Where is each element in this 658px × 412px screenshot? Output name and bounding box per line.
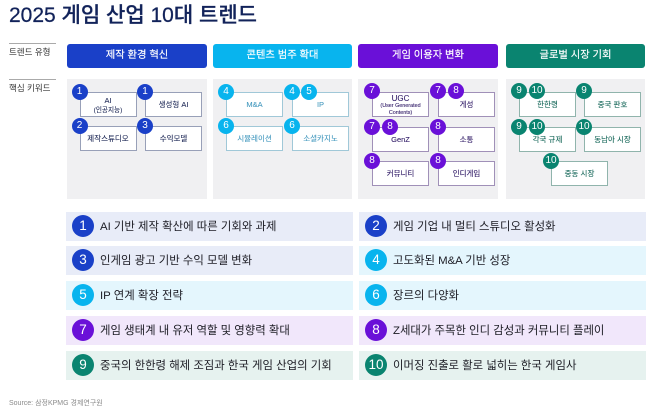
trend 5: 5 (79, 287, 87, 302)
keyword: generative AI: 생성형 AI (159, 100, 188, 109)
keyword: social casino (292, 126, 349, 151)
keyword: AI: AI (104, 96, 112, 104)
row label: key keywords: 핵심 키워드 (9, 83, 50, 93)
trend 7: 7 (79, 322, 87, 337)
header: content expansion: 콘텐츠 범주 확대 (246, 50, 319, 61)
trend 6: 장르의 다양화 (393, 290, 459, 302)
panel: production keywords: 1 (142, 86, 148, 97)
panel: user keywords: 7 (369, 85, 375, 96)
keyword: China license: 중국 판호 (598, 100, 627, 109)
panel: user keywords: 8 (387, 121, 393, 132)
trend 1 (66, 212, 353, 241)
panel: global keywords (506, 79, 645, 199)
keyword: M&A: M&A (246, 100, 263, 109)
trend 4: 고도화된 M&A 기반 성장 (393, 255, 510, 267)
keyword: national regulation (519, 127, 576, 152)
keyword: indie game: 인디게임 (453, 169, 480, 178)
panel: global keywords: 10 (545, 155, 557, 166)
keyword: generative AI (145, 92, 202, 117)
panel: user keywords (358, 79, 498, 199)
header: content expansion (213, 44, 352, 68)
trend 9: 중국의 한한령 해제 조짐과 한국 게임 산업의 기회 (100, 360, 332, 372)
panel: global keywords: 9 (516, 121, 522, 132)
panel: user keywords: 8 (369, 155, 375, 166)
keyword: indie game (438, 161, 495, 186)
keyword: gameplay nature: 게성 (460, 100, 473, 109)
keyword: UGC (372, 92, 429, 117)
row label: trend type: 트렌드 유형 (9, 47, 50, 57)
trend 1: AI 기반 제작 확산에 따른 기회와 과제 (100, 221, 276, 233)
keyword: social casino: 소셜카지노 (303, 134, 338, 143)
panel: content keywords: 4 (289, 86, 295, 97)
panel: content keywords: 5 (306, 86, 312, 97)
trend 3 (66, 246, 353, 275)
keyword: Southeast Asia market (584, 127, 641, 152)
keyword: Southeast Asia market: 동남아 시장 (594, 135, 631, 144)
trend 6: 6 (372, 287, 380, 302)
panel: production keywords: 2 (77, 120, 82, 131)
panel: global keywords: 9 (581, 85, 587, 96)
trend 4 (359, 246, 646, 275)
trend 3: 인게임 광고 기반 수익 모델 변화 (100, 255, 252, 267)
title: 2025 게임 산업 10대 트렌드 (9, 4, 257, 27)
panel: content keywords: 4 (223, 86, 229, 97)
keyword: production studio (80, 126, 136, 151)
panel: content keywords (213, 79, 352, 199)
panel: user keywords: 8 (435, 121, 441, 132)
trend 8 (359, 316, 646, 345)
row label: key keywords (9, 79, 56, 103)
keyword: communication: 소통 (460, 135, 473, 144)
trend 8: Z세대가 주목한 인디 감성과 커뮤니티 플레이 (393, 325, 604, 337)
trend 2 (359, 212, 646, 241)
trend 5 (66, 281, 353, 310)
panel: content keywords: 6 (289, 120, 295, 131)
keyword: gameplay nature (438, 92, 495, 117)
keyword: UGC: UGC (392, 94, 409, 103)
panel: production keywords (67, 79, 207, 199)
keyword: revenue model (145, 126, 202, 151)
trend 2: 2 (372, 218, 380, 233)
header: game user change (358, 44, 498, 68)
keyword: revenue model: 수익모델 (160, 134, 187, 143)
panel: global keywords: 10 (531, 121, 543, 132)
panel: production keywords: 1 (77, 86, 82, 97)
keyword: UGC: Contents) (389, 110, 412, 116)
keyword: Middle East market: 중동 시장 (565, 169, 594, 178)
trend 3: 3 (79, 252, 87, 267)
panel: user keywords: 7 (435, 85, 441, 96)
trend 9 (66, 351, 353, 380)
keyword: national regulation: 각국 규제 (533, 135, 562, 144)
keyword: GenZ (372, 127, 429, 152)
trend 4: 4 (372, 252, 380, 267)
keyword: community (372, 161, 429, 186)
keyword: UGC: (User Generated (380, 103, 421, 109)
keyword: M&A (226, 92, 283, 117)
trend 2: 게임 기업 내 멀티 스튜디오 활성화 (393, 221, 556, 233)
header: game user change: 게임 이용자 변화 (392, 50, 464, 61)
keyword: China license (584, 92, 641, 117)
keyword: China restriction (519, 92, 576, 117)
keyword: IP: IP (317, 100, 324, 109)
header: production environment: 제작 환경 혁신 (106, 50, 168, 61)
keyword: Middle East market (551, 161, 608, 186)
keyword: production studio: 제작스튜디오 (87, 134, 129, 143)
panel: production keywords: 3 (142, 120, 148, 131)
keyword: AI: (인공지능) (94, 106, 122, 114)
row label: trend type (9, 43, 56, 67)
trend 7: 게임 생태계 내 유저 역할 및 영향력 확대 (100, 325, 290, 337)
trend 9: 9 (79, 357, 87, 372)
panel: user keywords: 8 (453, 85, 459, 96)
panel: user keywords: 8 (435, 155, 441, 166)
trend 5: IP 연계 확장 전략 (100, 290, 183, 302)
trend 1: 1 (79, 218, 87, 233)
source note: Source: 삼정KPMG 경제연구원 (9, 400, 103, 407)
trend 10 (359, 351, 646, 380)
keyword: GenZ: GenZ (391, 135, 410, 144)
panel: global keywords: 9 (516, 85, 522, 96)
keyword: IP (292, 92, 349, 117)
trend 6 (359, 281, 646, 310)
panel: content keywords: 6 (223, 120, 229, 131)
trend 10: 10 (368, 357, 384, 372)
header: production environment (67, 44, 207, 68)
keyword: communication (438, 127, 495, 152)
panel: global keywords: 10 (531, 85, 543, 96)
header: global market: 글로벌 시장 기회 (539, 50, 612, 61)
keyword: simulation: 시뮬레이션 (237, 134, 272, 143)
trend 8: 8 (372, 322, 380, 337)
header: global market (506, 44, 645, 68)
panel: global keywords: 10 (578, 121, 590, 132)
keyword: community: 커뮤니티 (387, 169, 414, 178)
trend 7 (66, 316, 353, 345)
keyword: simulation (226, 126, 283, 151)
trend 10: 이머징 진출로 활로 넓히는 한국 게임사 (393, 360, 576, 372)
keyword: AI (80, 92, 136, 117)
panel: user keywords: 7 (369, 121, 375, 132)
keyword: China restriction: 한한령 (537, 100, 558, 109)
